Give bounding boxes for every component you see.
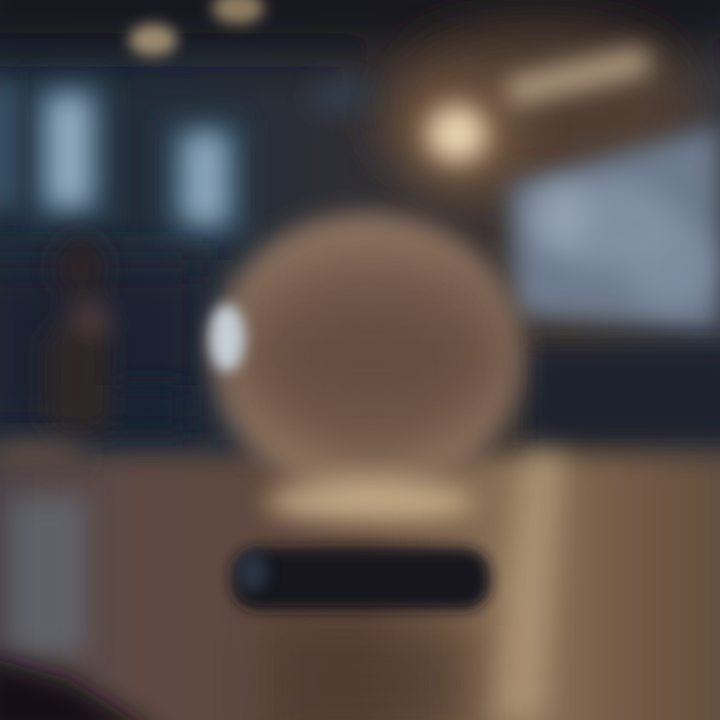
ceiling lights: [129, 0, 652, 193]
blurred person: [45, 236, 187, 435]
glow under the ball: [265, 480, 475, 524]
dark counter on right: [525, 345, 720, 445]
crystal ball: [209, 213, 522, 497]
dark lower left wall: [0, 260, 210, 440]
ball stand: [232, 548, 490, 610]
ceiling: [0, 0, 720, 190]
windows on left wall: [0, 78, 370, 240]
table: [0, 439, 720, 720]
screen on right wall: [510, 125, 720, 330]
